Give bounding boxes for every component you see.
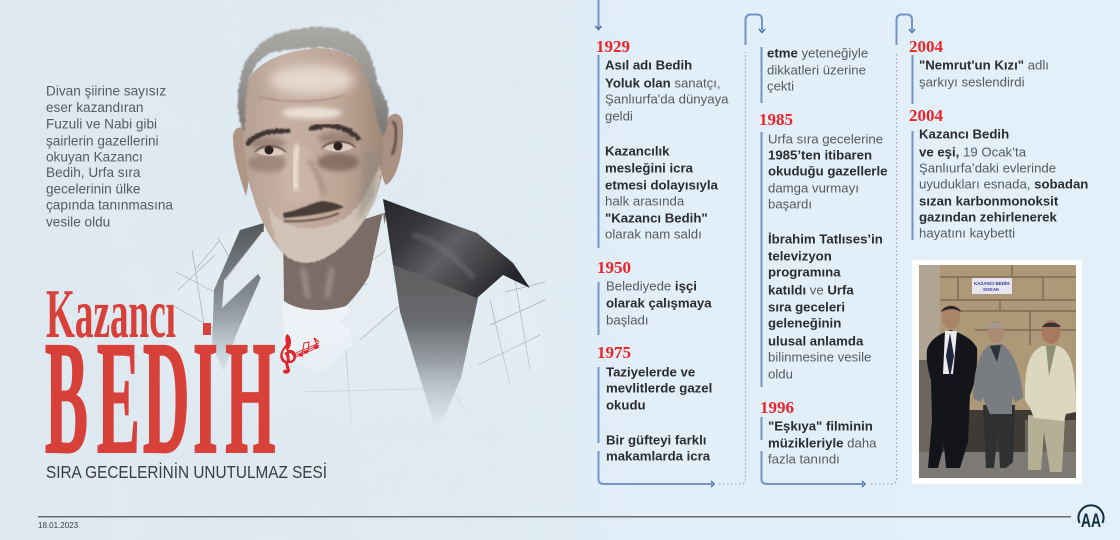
logo: AA xyxy=(1078,505,1104,532)
man in grey suit xyxy=(973,321,1023,468)
timeline entry: 1985: bilinmesine vesile xyxy=(768,350,871,364)
timeline entry: 1929: 1929 xyxy=(596,37,630,56)
timeline entry: 1985 xyxy=(759,110,887,382)
timeline entry: 1996: 1996 xyxy=(760,398,794,417)
date: 18.01.2023 xyxy=(38,521,79,530)
timeline entry: 1975: mevlitlerde gazel xyxy=(606,380,712,396)
timeline entry: 1975: Bir güfteyi farklı xyxy=(606,432,706,448)
intro text xyxy=(46,84,173,230)
forehead highlight xyxy=(270,65,354,95)
intro text: Divan şiirine sayısız xyxy=(46,84,166,98)
eye shadows xyxy=(248,154,288,172)
timeline entry: 2004 death: Kazancı Bedih xyxy=(919,126,1009,142)
timeline entry: 1975 xyxy=(597,46,868,464)
timeline entry: 1985: 1985 xyxy=(759,110,793,129)
timeline entry: 1929: geldi xyxy=(605,108,633,124)
neck xyxy=(282,212,387,310)
title: Kazancı: Kazancı xyxy=(46,276,176,353)
timeline entry: 2004 death xyxy=(909,106,1088,240)
timeline entry: 1985: katıldı ve Urfa xyxy=(768,282,854,298)
timeline entry: 2004 death: Şanlıurfa’daki evlerinde xyxy=(919,160,1056,176)
timeline entry: 1985: sıra geceleri xyxy=(768,300,845,314)
eyebrows xyxy=(248,126,358,144)
timeline entry: 1996: fazla tanındı xyxy=(768,452,840,466)
intro text: eser kazandıran xyxy=(46,100,143,115)
timeline entry: 1950: olarak çalışmaya xyxy=(606,296,712,310)
vest lower panel xyxy=(393,265,478,417)
moustache and mouth xyxy=(283,201,344,218)
timeline entry: 1929 xyxy=(596,37,729,242)
timeline entry: 1985: damga vurmayı xyxy=(768,180,859,196)
intro text: Fuzuli ve Nabi gibi xyxy=(46,116,157,132)
timeline entry: 1950: başladı xyxy=(606,312,649,328)
timeline entry: 2004 death: hayatını kaybetti xyxy=(919,226,1015,240)
timeline entry: 1950: 1950 xyxy=(597,258,631,277)
timeline entry: 1929: Yoluk olan sanatçı, xyxy=(605,76,721,90)
nose xyxy=(282,146,323,203)
title: BEDİH: BEDİH xyxy=(45,308,276,487)
intro text: çapında tanınmasına xyxy=(46,198,173,212)
beard stubble xyxy=(268,165,380,263)
photo: three men under street sign: KAZANCI BEDİH xyxy=(974,280,1010,286)
timeline entry: 1975: 1975 xyxy=(597,343,631,362)
timeline entry: 1985: geleneğinin xyxy=(768,316,841,330)
timeline entry: 2004 death: gazından zehirlenerek xyxy=(919,210,1057,224)
timeline connectors xyxy=(596,0,915,487)
timeline entry: 1985: başardı xyxy=(768,196,812,212)
timeline entry: 2004 song: şarkıyı seslendirdi xyxy=(919,74,1025,90)
timeline entry: 1996 xyxy=(760,398,877,466)
intro text: okuyan Kazancı xyxy=(46,150,143,164)
left ear xyxy=(233,127,250,196)
timeline entry: 1929: "Kazancı Bedih" xyxy=(605,210,708,226)
timeline entry: 2004 death: ve eşi, 19 Ocak’ta xyxy=(919,144,1027,160)
timeline entry: 1975: Taziyelerde ve xyxy=(606,364,695,380)
timeline entry: 1929: mesleğini icra xyxy=(605,160,694,176)
timeline entry: 1985: televizyon xyxy=(768,248,832,264)
timeline entry: 1929: Kazancılık xyxy=(605,144,670,158)
eyes xyxy=(255,147,286,156)
hair xyxy=(238,27,388,137)
timeline entry: 1985: programına xyxy=(768,264,841,280)
timeline entry: 1950: Belediyede işçi xyxy=(606,278,697,294)
vest left strap xyxy=(212,223,264,372)
timeline entry: 1985: ulusal anlamda xyxy=(768,334,864,348)
timeline entry: 1985: İbrahim Tatlıses’in xyxy=(768,232,883,246)
footer rule xyxy=(38,516,1071,518)
timeline entry: 1950 xyxy=(597,258,712,328)
head and face xyxy=(242,48,383,263)
background xyxy=(0,0,498,540)
intro text: şairlerin gazellerini xyxy=(46,134,159,148)
timeline entry: 1996: müzikleriyle daha xyxy=(768,436,877,450)
timeline entry: 2004 death: uyudukları esnada, sobadan xyxy=(919,176,1088,192)
timeline entry: 1929: etmesi dolayısıyla xyxy=(605,178,719,192)
timeline entry: 1985: oldu xyxy=(768,366,793,382)
right collar xyxy=(367,213,399,305)
timeline entry: 1929: Asıl adı Bedih xyxy=(605,58,692,72)
intro text: Bedih, Urfa sıra xyxy=(46,165,141,180)
icon: treble clef with notes xyxy=(280,334,319,374)
man in dark suit xyxy=(927,305,977,468)
timeline entry: 2004 song: "Nemrut'un Kızı" adlı xyxy=(919,58,1049,72)
shirt and vest body xyxy=(166,199,548,440)
left collar xyxy=(222,232,284,308)
vest satin shoulder xyxy=(383,199,530,298)
timeline entry: 1996: "Eşkıya" filminin xyxy=(768,418,873,434)
intro text: gecelerinin ülke xyxy=(46,182,140,196)
timeline entry: 1975: dikkatleri üzerine xyxy=(767,62,866,78)
timeline entry: 2004 song: 2004 xyxy=(909,37,944,56)
timeline entry: 1975: çekti xyxy=(767,78,794,94)
logo: AA: AA xyxy=(1081,511,1101,532)
timeline entry: 1929: Şanlıurfa'da dünyaya xyxy=(605,92,729,106)
man in cream suit xyxy=(1025,320,1076,472)
timeline entry: 1985: Urfa sıra gecelerine xyxy=(768,132,883,146)
timeline entry: 1985: okuduğu gazellerle xyxy=(768,164,887,178)
timeline entry: 1975: etme yeteneğiyle xyxy=(767,46,868,60)
timeline entry: 2004 song xyxy=(909,37,1049,90)
timeline entry: 1929: halk arasında xyxy=(605,194,685,208)
timeline entry: 2004 death: 2004 xyxy=(909,106,944,125)
right ear xyxy=(380,114,403,185)
timeline entry: 1929: olarak nam saldı xyxy=(605,226,702,242)
portrait photo of Kazancı Bedih xyxy=(166,27,548,440)
t-shirt xyxy=(282,300,352,364)
timeline entry: 1975: makamlarda icra xyxy=(606,448,711,464)
timeline entry: 2004 death: sızan karbonmonoksit xyxy=(919,194,1059,208)
photo: three men under street sign xyxy=(912,260,1082,484)
intro text: vesile oldu xyxy=(46,214,110,230)
timeline entry: 1975: okudu xyxy=(606,398,646,412)
subtitle: SIRA GECELERİNİN UNUTULMAZ SESİ xyxy=(46,462,327,482)
photo: three men under street sign: SOKAK xyxy=(983,287,1000,292)
timeline entry: 1985: 1985’ten itibaren xyxy=(768,148,872,162)
